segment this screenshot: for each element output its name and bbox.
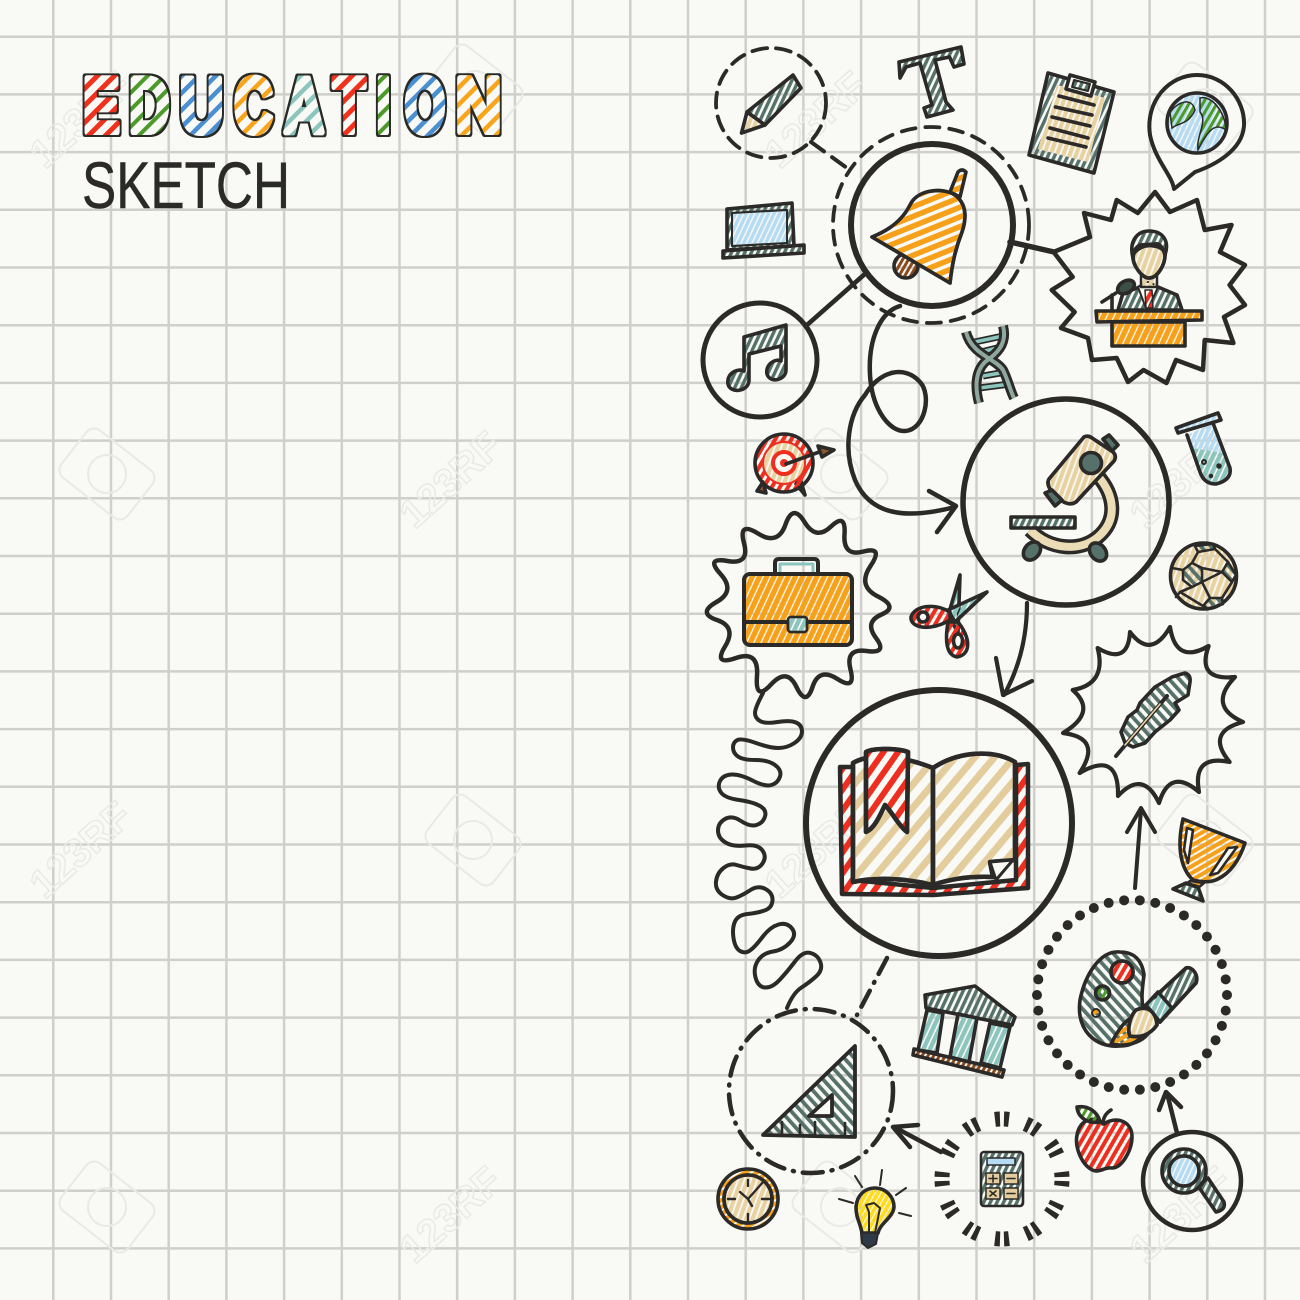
- icon: letter T: [899, 47, 964, 117]
- icon: calculator: [981, 1152, 1023, 1206]
- node: feather: [1063, 627, 1243, 803]
- watermarks: 123RF: [22, 64, 140, 177]
- icon: palette: [1079, 952, 1197, 1046]
- icon: magnifying glass: [1162, 1149, 1224, 1212]
- watermarks: 123RF: [757, 64, 875, 177]
- node: bell: [833, 127, 1029, 323]
- icon: light bulb: [839, 1170, 911, 1248]
- icon: feather: [1116, 673, 1190, 756]
- connector: bell to teacher: [1010, 242, 1054, 252]
- watermarks: 123RF: [757, 794, 875, 907]
- icon: music notes: [728, 325, 786, 390]
- node: music: [703, 303, 817, 417]
- node: magnifier: [1143, 1132, 1241, 1230]
- watermarks: 123RF: [392, 1159, 510, 1272]
- title: EDUCATION: A: [284, 61, 324, 149]
- icon: DNA helix: [966, 326, 1014, 403]
- icon: bell: [872, 170, 966, 283]
- connector: arrow to feather: [1127, 808, 1155, 888]
- icon: teacher at podium: [1096, 231, 1202, 346]
- watermarks: 123RF: [1122, 1159, 1240, 1272]
- node: triangle ruler: [729, 1009, 893, 1173]
- icon: test tube: [1176, 413, 1230, 484]
- node: teacher: [1052, 192, 1245, 383]
- icon: set square: [763, 1046, 855, 1137]
- title: EDUCATION: O: [405, 61, 445, 149]
- icon: clock: [718, 1169, 778, 1229]
- icon: globe pin: [1149, 75, 1244, 189]
- connector: wavy line from briefcase to triangle: [716, 693, 821, 1008]
- connector: arrow to book: [996, 603, 1032, 695]
- icon: soccer ball: [1170, 543, 1236, 609]
- title: EDUCATION: T: [333, 61, 365, 149]
- icon: trophy: [1173, 819, 1245, 901]
- connector: book to triangle: [857, 958, 887, 1015]
- icon: open book: [840, 749, 1028, 895]
- node: microscope: [963, 399, 1169, 605]
- node: palette: [1037, 900, 1227, 1090]
- watermarks: 123RF: [1122, 424, 1240, 537]
- watermarks: 123RF: [392, 424, 510, 537]
- icon: apple: [1076, 1107, 1132, 1171]
- icon: laptop: [723, 203, 804, 258]
- title: EDUCATION: E: [83, 61, 120, 149]
- connector: curly arrow to microscope: [848, 306, 956, 532]
- title: EDUCATION: D: [129, 61, 169, 149]
- connector: arrow magnifier to palette: [1159, 1092, 1181, 1133]
- icon: scissors: [911, 575, 987, 657]
- icon: target: [755, 434, 834, 495]
- icon: clipboard: [1029, 73, 1114, 173]
- node: calculator: [942, 1119, 1062, 1239]
- title: EDUCATION: I: [376, 61, 390, 149]
- icon: bank building: [913, 986, 1015, 1077]
- node: book: [806, 690, 1072, 956]
- title: EDUCATION: [83, 61, 502, 149]
- watermarks: 123RF: [22, 794, 140, 907]
- connector: arrow calculator to triangle: [893, 1125, 941, 1152]
- title: EDUCATION: U: [180, 61, 223, 149]
- node: briefcase: [707, 513, 889, 697]
- connector: pencil to bell: [811, 142, 847, 168]
- icon: briefcase: [744, 559, 852, 645]
- icon: microscope: [1011, 435, 1118, 564]
- icon: pencil: [742, 75, 801, 133]
- title: EDUCATION: N: [456, 61, 502, 149]
- title: EDUCATION: C: [234, 61, 273, 149]
- subtitle: SKETCH: SKETCH: [82, 148, 290, 222]
- node: pencil: [716, 48, 826, 158]
- connector: bell to music: [807, 273, 866, 325]
